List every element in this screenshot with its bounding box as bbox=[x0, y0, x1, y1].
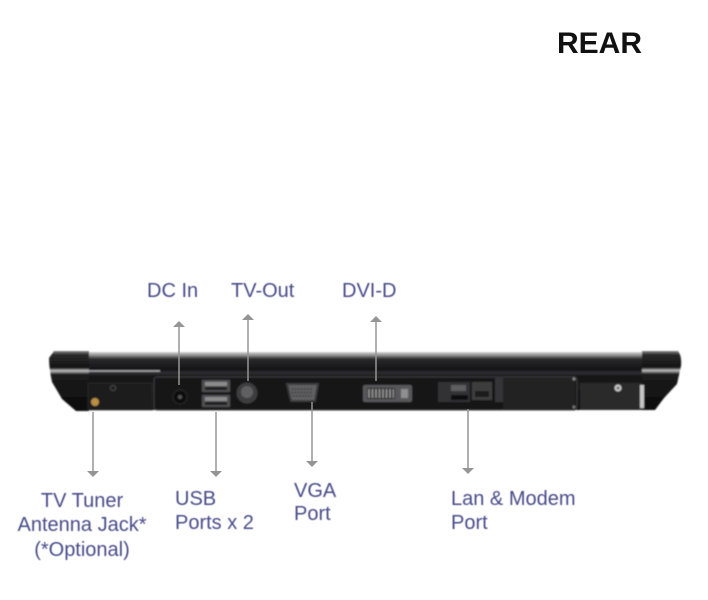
label: Lan and Modem Port: Lan & Modem bbox=[451, 488, 576, 510]
arrow: VGA bbox=[306, 402, 318, 467]
antenna jack bbox=[91, 398, 99, 406]
label: VGA Port: Port bbox=[294, 503, 331, 525]
laptop body bbox=[88, 352, 642, 410]
DC in port bbox=[173, 390, 187, 404]
label: TV Tuner Antenna Jack: (*Optional) bbox=[34, 539, 130, 561]
label: VGA Port: VGA bbox=[294, 480, 337, 502]
label: TV Tuner Antenna Jack: Antenna Jack* bbox=[18, 514, 147, 536]
laptop rear view bbox=[49, 351, 681, 411]
title: REAR bbox=[557, 27, 642, 60]
right hinge bbox=[642, 351, 681, 410]
label: USB Ports x 2: USB bbox=[175, 488, 216, 510]
arrow: TV-Out bbox=[242, 314, 254, 381]
arrow: LAN and modem bbox=[462, 409, 474, 474]
TV-out port bbox=[236, 382, 258, 404]
label: TV Tuner Antenna Jack: TV Tuner bbox=[41, 490, 123, 512]
label: DVI-D: DVI-D bbox=[342, 280, 396, 302]
USB ports bbox=[202, 380, 230, 407]
DVI-D port bbox=[363, 385, 412, 402]
port panel bbox=[154, 377, 577, 410]
right panel bbox=[580, 383, 644, 410]
label: Lan and Modem Port: Port bbox=[451, 512, 488, 534]
arrow: DC In bbox=[173, 321, 185, 385]
LAN and modem ports bbox=[438, 378, 503, 402]
VGA port bbox=[287, 384, 318, 401]
label: DC In: DC In bbox=[147, 280, 198, 302]
arrow: DVI-D bbox=[370, 316, 382, 381]
body highlight line bbox=[88, 370, 160, 372]
left hinge bbox=[49, 351, 89, 411]
left antenna panel bbox=[88, 383, 152, 410]
arrow: USB bbox=[210, 412, 222, 477]
label: USB Ports x 2: Ports x 2 bbox=[175, 512, 254, 534]
arrow: TV Tuner bbox=[87, 412, 99, 477]
label: TV-Out: TV-Out bbox=[231, 280, 295, 302]
